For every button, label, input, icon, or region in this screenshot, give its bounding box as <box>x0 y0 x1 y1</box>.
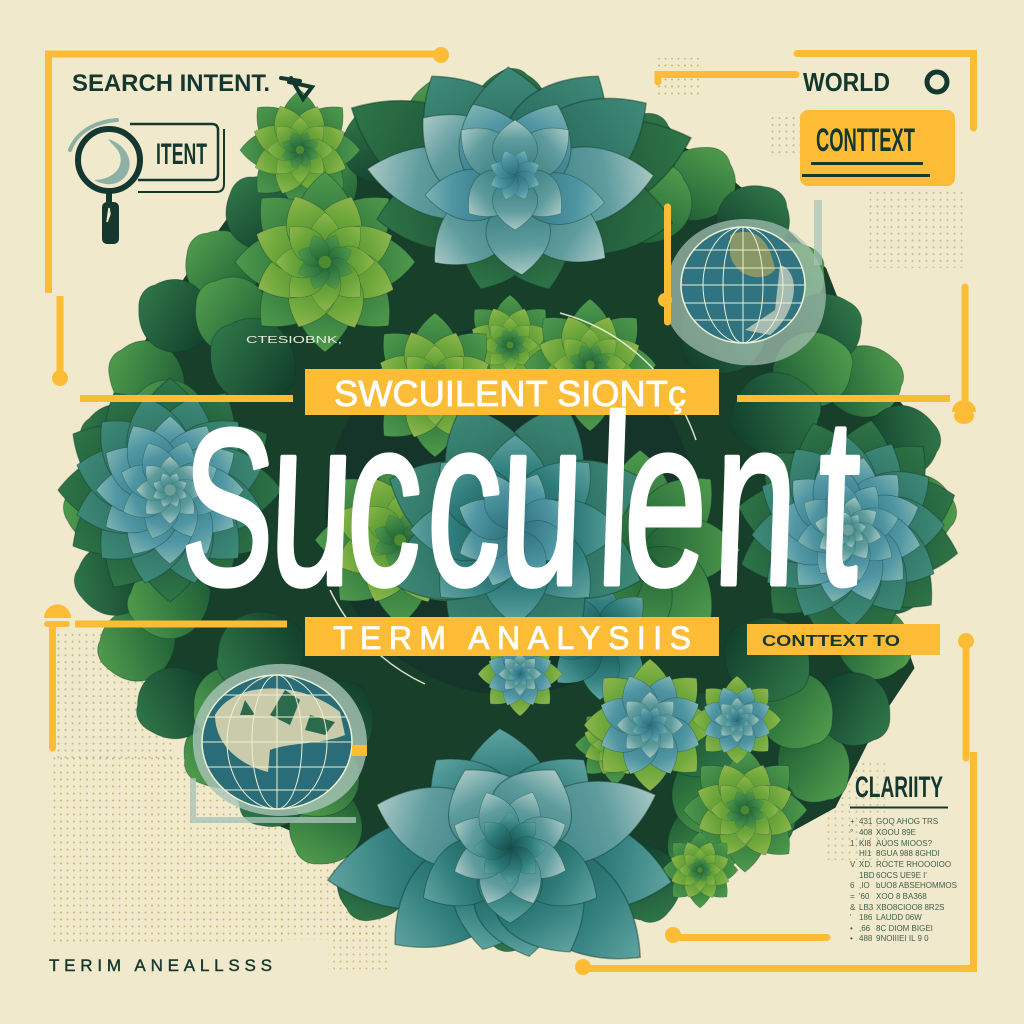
outer foliage leaves <box>63 68 957 952</box>
clarity list: GOQ AHOG TRS <box>876 817 938 826</box>
callout: context <box>800 110 955 186</box>
heading: search intent: SEARCH INTENT. <box>72 70 270 97</box>
frame: lower-left line with dome <box>44 604 287 748</box>
thin lens circle arcs <box>330 313 696 684</box>
clarity list: ROCTE RHOOOIOO <box>876 860 951 869</box>
clarity list: LB3 <box>859 903 874 912</box>
clarity list: 1BD <box>859 871 875 880</box>
globe: lower left <box>193 664 367 820</box>
icon: magnifier with intent tag <box>70 120 224 244</box>
clarity list: = <box>850 892 855 901</box>
small leaf label: CTESIOBNK, <box>246 335 342 346</box>
clarity list: XD. <box>859 860 872 869</box>
clarity list: 6OCS UE9E I' <box>876 871 927 880</box>
clarity list: 6 <box>850 881 855 890</box>
clarity list: 8C DIOM BIGEI <box>876 924 933 933</box>
rosette: green small top-left <box>237 88 363 212</box>
clarity list: V <box>850 860 856 869</box>
clarity list: 488 <box>859 934 873 943</box>
clarity list: 8GUA 988 8GHDI <box>876 849 940 858</box>
rosette: right blue succulent <box>704 386 992 674</box>
banner: succulent sionts: SWCUILENT SIONTç <box>334 373 686 414</box>
clarity list: KI8 <box>859 839 872 848</box>
rosette: bottom large blue succulent <box>320 725 681 992</box>
rosette: left blue succulent <box>49 369 291 611</box>
rosette: central succulent mass <box>311 293 740 718</box>
title: Succulent <box>178 368 864 636</box>
clarity list: '60 <box>859 892 870 901</box>
clarity list: 408 <box>859 828 873 837</box>
rosette: small blue-lime pair <box>581 656 783 794</box>
heading: clarity: CLARIITY <box>855 771 943 804</box>
foliage base <box>87 101 933 929</box>
label: world: WORLD <box>803 67 890 97</box>
label: term analysis footer: TERIM ANEALLSSS <box>49 956 272 975</box>
frame: top-left corner <box>48 47 449 386</box>
icon: ring <box>927 72 947 92</box>
clarity list: HI1 <box>859 849 872 858</box>
clarity list: + <box>850 817 855 826</box>
cluster: lime foliage lower right <box>573 704 810 909</box>
clarity list: • <box>850 934 853 943</box>
clarity list: XOO 8 BA368 <box>876 892 927 901</box>
rosette: bright green succulent <box>230 169 420 355</box>
clarity list: XBO8CIOO8 8R2S <box>876 903 944 912</box>
halftone dot patterns <box>52 58 966 970</box>
frame: top-right corner <box>658 54 974 322</box>
clarity list: bUO8 ABSEHOMMOS <box>876 881 957 890</box>
clarity list: • <box>850 924 853 933</box>
frame: lower-right corner <box>575 633 974 975</box>
heading: clarity <box>850 771 948 808</box>
banner: term analysis: TERM ANALYSIIS <box>333 620 691 656</box>
clarity list: XOOU 89E <box>876 828 916 837</box>
clarity list: AUOS MIOOS? <box>876 839 933 848</box>
callout: context to: CONTTEXT TO <box>762 633 900 650</box>
clarity list: 9NOIIIEI IL 9 0 <box>876 934 929 943</box>
icon: arrow glyph <box>281 78 312 99</box>
clarity list <box>850 817 957 943</box>
callout: context to <box>747 624 940 655</box>
clarity list: ,IO <box>859 881 870 890</box>
rosette: top large blue succulent <box>330 48 705 302</box>
frame: right middle line with dome <box>737 287 976 424</box>
frame: left middle line <box>80 395 293 402</box>
clarity list: & <box>850 903 856 912</box>
callout: context: CONTTEXT <box>816 122 915 158</box>
clarity list: LAUDD 06W <box>876 913 922 922</box>
clarity list: ,66 <box>859 924 871 933</box>
icon: magnifier with intent tag: ITENT <box>156 138 207 171</box>
clarity list: ' <box>850 913 852 922</box>
clarity list: ° <box>850 828 853 837</box>
clarity list: 186 <box>859 913 873 922</box>
globe: upper right <box>664 200 826 365</box>
clarity list: 1 <box>850 839 855 848</box>
clarity list: 431 <box>859 817 873 826</box>
